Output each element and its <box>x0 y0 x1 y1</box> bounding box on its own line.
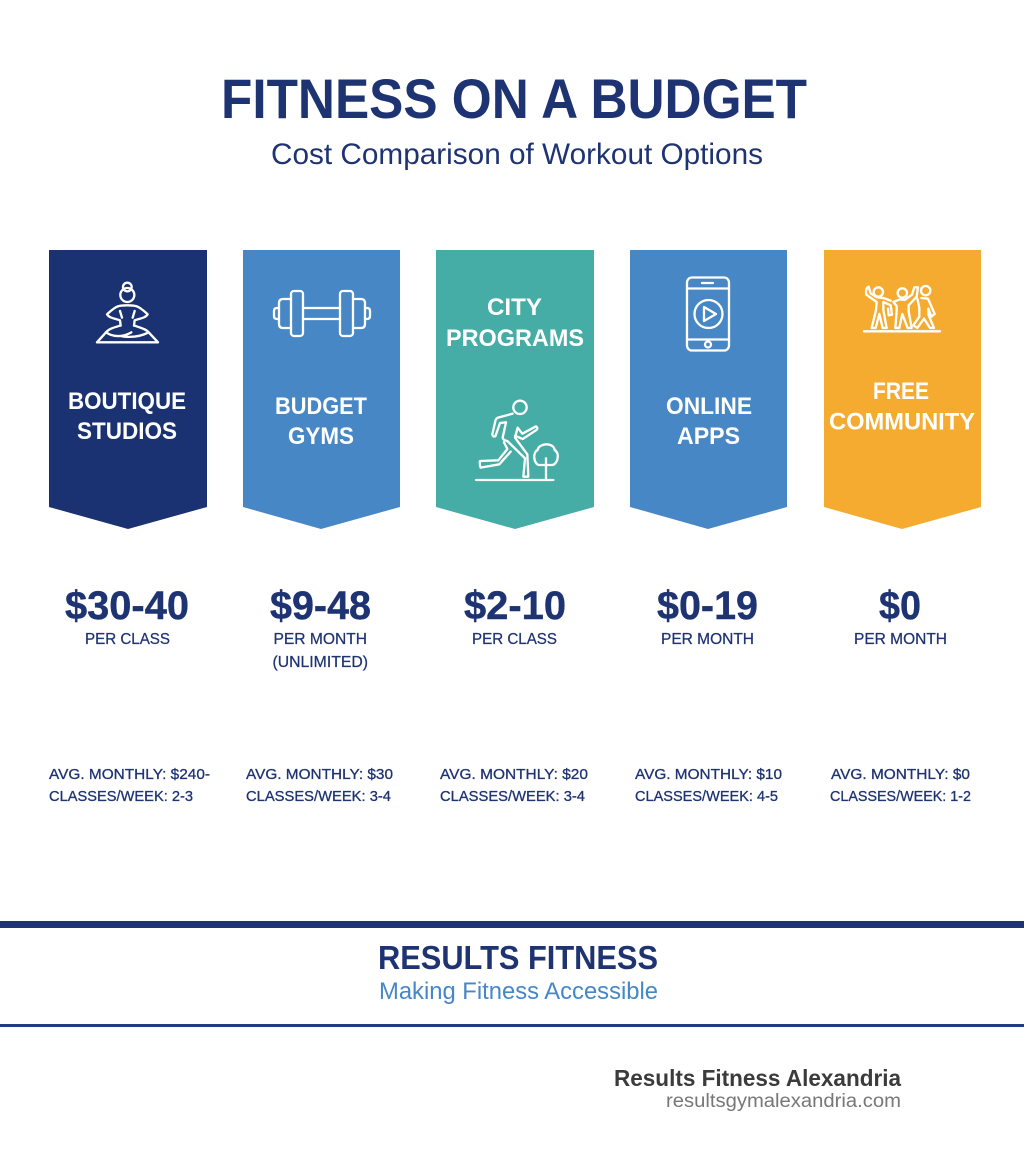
details: city programs: CLASSES/WEEK: 3-4 <box>440 788 585 805</box>
details: budget gyms: CLASSES/WEEK: 3-4 <box>246 788 391 805</box>
attribution name: Results Fitness Alexandria <box>614 1065 901 1091</box>
panel: budget gyms: GYMS <box>288 423 354 450</box>
footer brand name: RESULTS FITNESS <box>378 939 658 976</box>
price: budget gyms: (UNLIMITED) <box>272 654 368 671</box>
banner shape <box>630 250 787 529</box>
price: boutique studios: PER CLASS <box>85 631 170 648</box>
details: boutique studios: AVG. MONTHLY: $240- <box>49 766 210 783</box>
details: free community: CLASSES/WEEK: 1-2 <box>830 788 971 805</box>
icon: dumbbell <box>274 291 370 336</box>
details: online apps: AVG. MONTHLY: $10 <box>635 766 782 783</box>
price: free community <box>854 584 947 648</box>
details: boutique studios: CLASSES/WEEK: 2-3 <box>49 788 193 805</box>
details: online apps: CLASSES/WEEK: 4-5 <box>635 788 778 805</box>
price: city programs: PER CLASS <box>472 631 557 648</box>
price: online apps <box>657 584 758 648</box>
panel: free community: COMMUNITY <box>829 408 975 436</box>
price: free community: PER MONTH <box>854 631 947 648</box>
icon: runner and tree <box>476 401 558 480</box>
panel: boutique studios <box>49 250 207 529</box>
price: boutique studios: $30-40 <box>65 584 189 628</box>
footer tagline: Making Fitness Accessible <box>379 978 658 1005</box>
details: budget gyms: AVG. MONTHLY: $30 <box>246 766 393 783</box>
icon: meditating person <box>97 283 158 342</box>
panel: online apps <box>630 250 787 529</box>
panel: free community <box>824 250 981 529</box>
details: city programs: AVG. MONTHLY: $20 <box>440 766 588 783</box>
panel: budget gyms <box>243 250 400 529</box>
price: city programs: $2-10 <box>464 584 566 628</box>
panel: city programs <box>436 250 594 529</box>
price: city programs <box>464 584 566 648</box>
price: budget gyms <box>270 584 371 671</box>
subtitle: Cost Comparison of Workout Options <box>271 138 763 171</box>
panel: city programs: PROGRAMS <box>446 325 584 352</box>
details: boutique studios <box>49 766 210 805</box>
label: BUDGET <box>275 393 367 420</box>
details: budget gyms <box>246 766 393 805</box>
banner shape <box>436 250 594 529</box>
banner shape <box>824 250 981 529</box>
label: BOUTIQUE <box>68 388 186 415</box>
details: online apps <box>635 766 782 805</box>
price: online apps: PER MONTH <box>661 631 754 648</box>
label: FREE <box>873 378 929 405</box>
panel: online apps: APPS <box>677 423 740 450</box>
prices row <box>65 584 947 671</box>
label: ONLINE <box>666 393 752 420</box>
banner shape <box>49 250 207 529</box>
price: online apps: $0-19 <box>657 584 758 628</box>
details row <box>49 766 971 805</box>
details: city programs <box>440 766 588 805</box>
price: free community: $0 <box>879 584 921 628</box>
banner shape <box>243 250 400 529</box>
title: FITNESS ON A BUDGET <box>221 67 807 130</box>
icon: group of people <box>864 286 940 331</box>
panel: boutique studios: STUDIOS <box>77 418 177 445</box>
details: free community <box>830 766 971 805</box>
label: CITY <box>487 294 542 321</box>
attribution url: resultsgymalexandria.com <box>666 1091 901 1112</box>
icon: phone with play button <box>687 278 729 350</box>
price: budget gyms: $9-48 <box>270 584 371 628</box>
price: boutique studios <box>65 584 189 648</box>
price: budget gyms: PER MONTH <box>274 631 367 648</box>
details: free community: AVG. MONTHLY: $0 <box>831 766 970 783</box>
